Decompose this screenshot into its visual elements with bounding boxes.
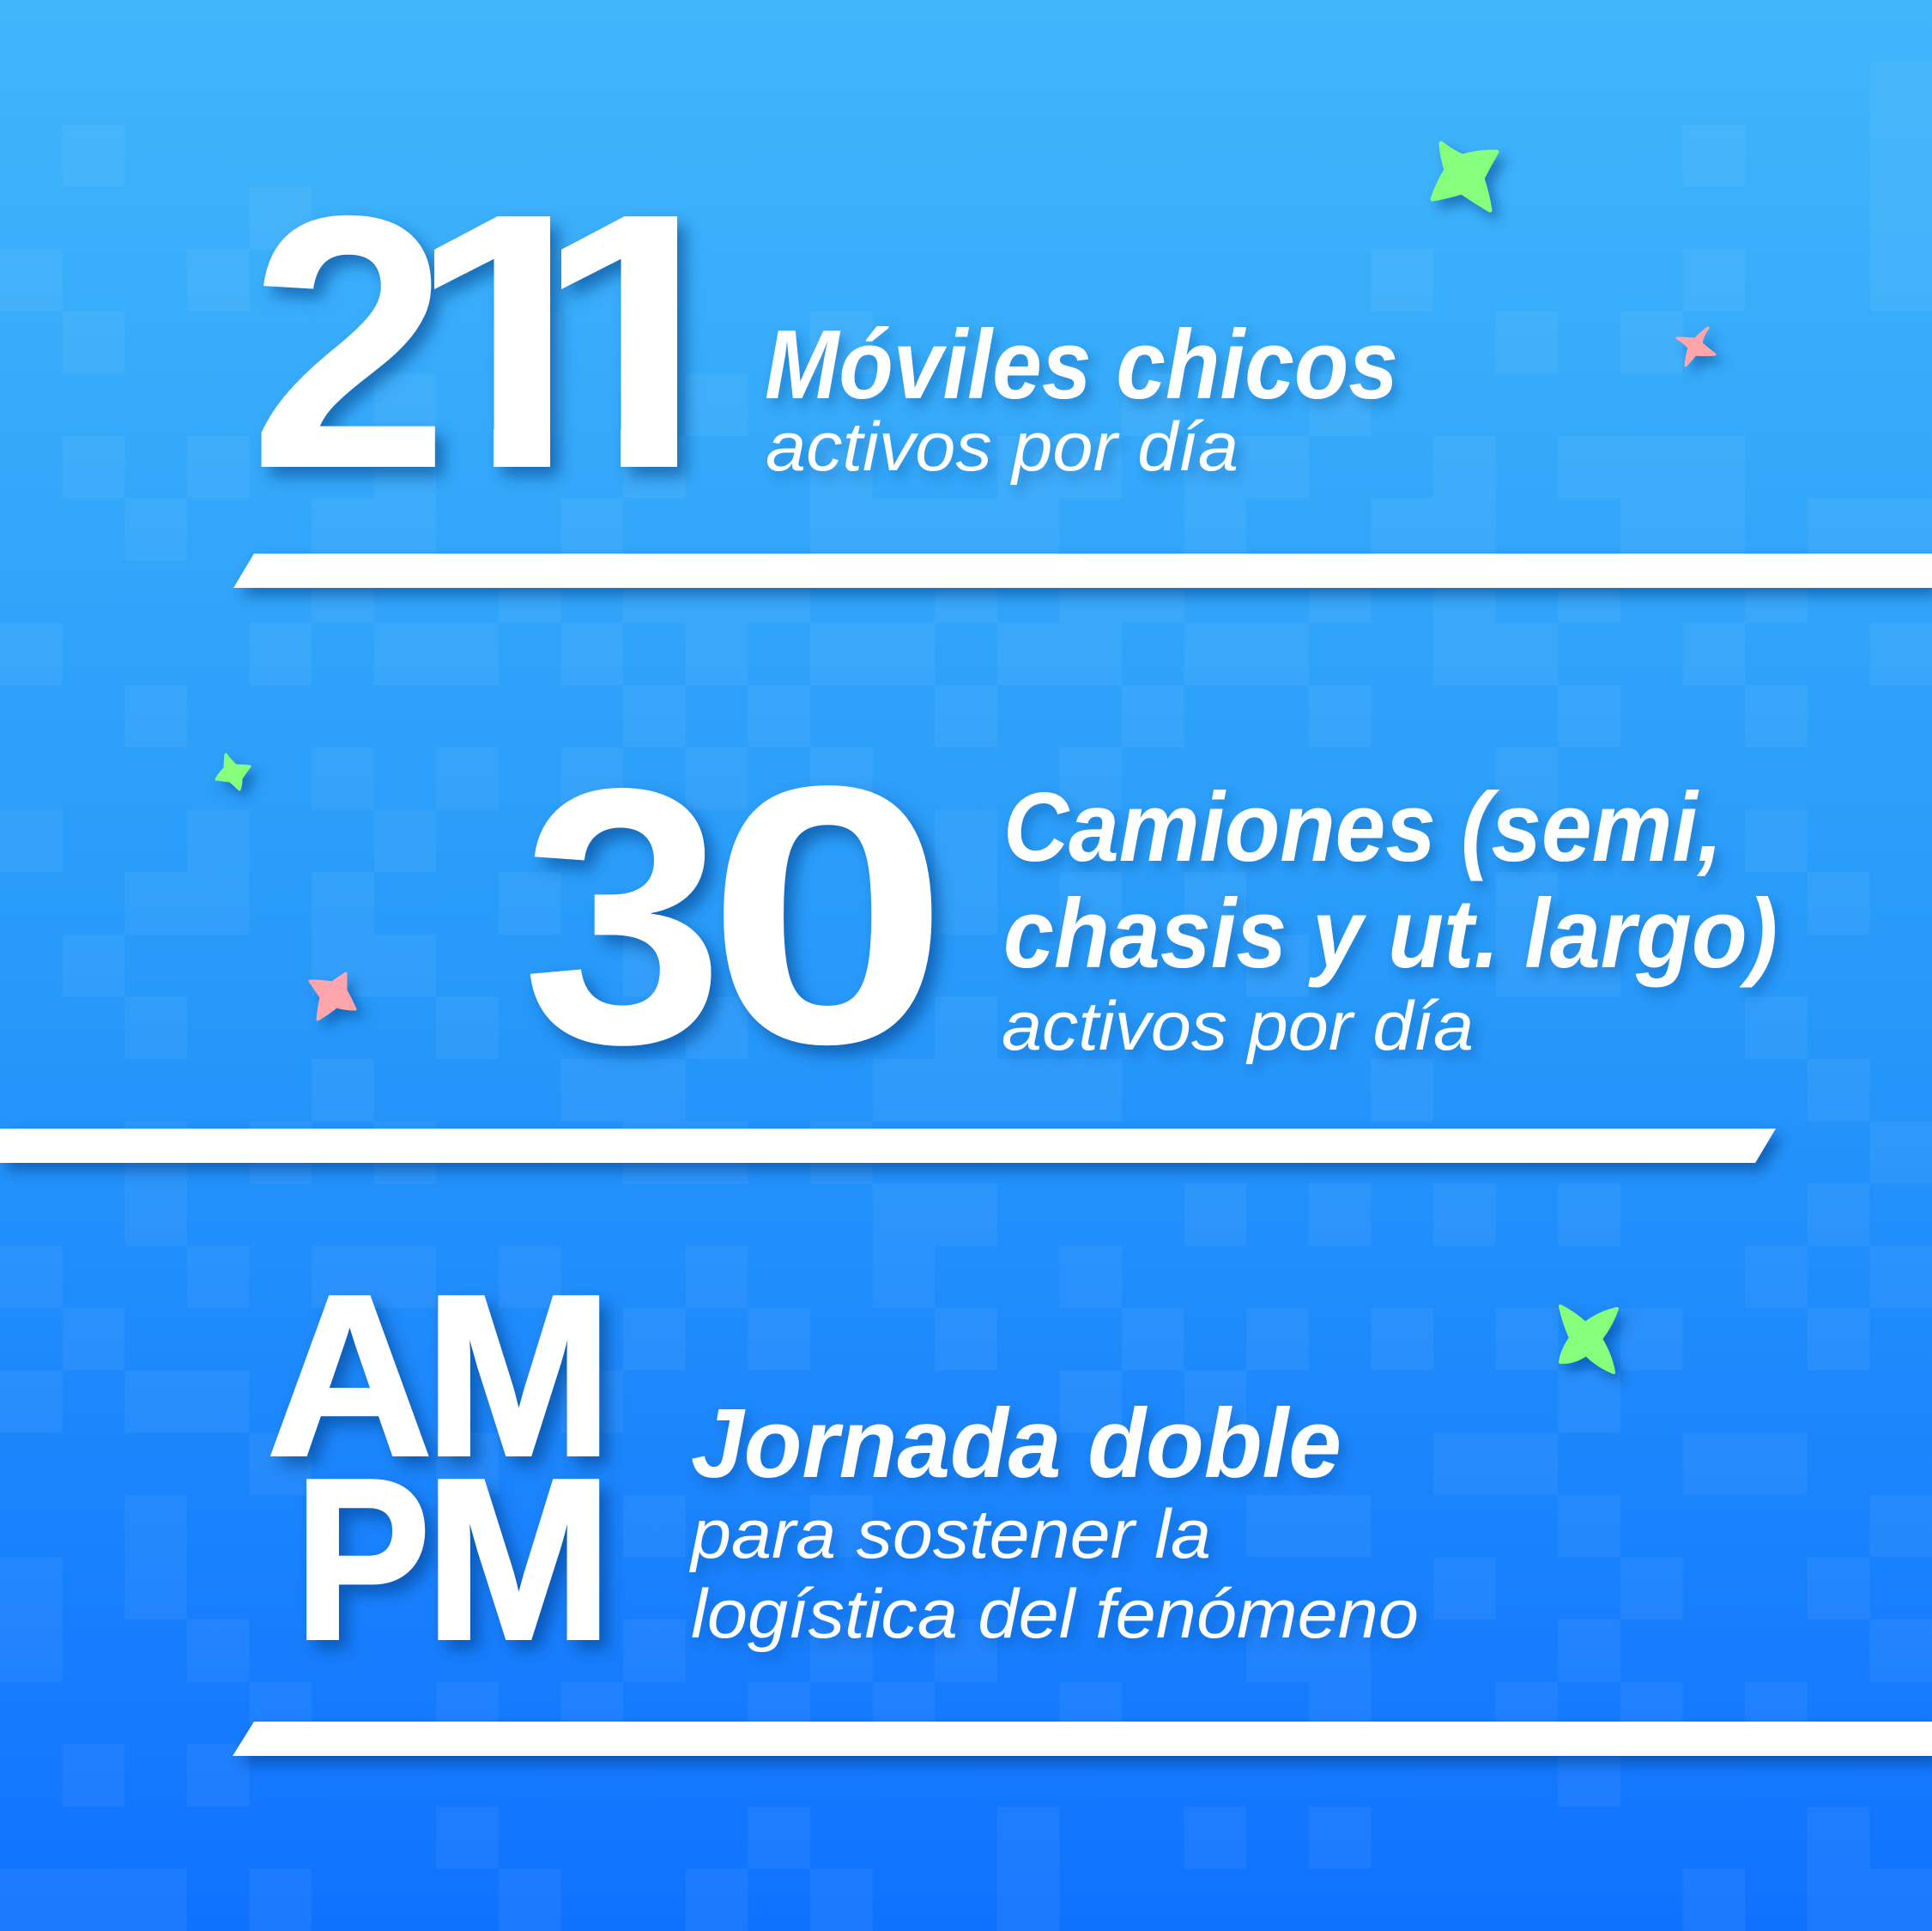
- heading: Jornada doble: Jornada doble: [691, 1389, 1341, 1498]
- big letters AM PM: A: [267, 1247, 433, 1504]
- subtext: activos por día: activos por día: [766, 409, 1239, 486]
- big letters AM PM: M: [425, 1432, 613, 1687]
- panel: camiones: [522, 709, 1778, 1120]
- subtext: para sostener la logística del fenómeno: para sostener la: [688, 1496, 1211, 1573]
- big number 30: 0: [706, 709, 949, 1120]
- icon: pink sparkle middle: [310, 973, 355, 1020]
- heading: Camiones (semi, chasis y ut. largo): chasis y ut. largo): [1003, 880, 1778, 989]
- heading: Camiones (semi, chasis y ut. largo): [1003, 773, 1778, 989]
- panel: jornada doble: [267, 1247, 1419, 1687]
- big number 30: [522, 709, 949, 1120]
- big number 30: 3: [522, 712, 724, 1119]
- big number 211: 1: [517, 137, 766, 544]
- big letters AM PM: [267, 1247, 613, 1687]
- divider 1: [233, 554, 1932, 588]
- divider 2: [0, 1129, 1776, 1163]
- divider 3: [233, 1722, 1932, 1756]
- panel: móviles chicos: [261, 215, 1402, 492]
- icon: pink sparkle top: [1677, 328, 1715, 366]
- subtext: para sostener la logística del fenómeno: logística del fenómeno: [691, 1576, 1419, 1653]
- big number 211: 1: [390, 137, 639, 544]
- subtext: activos por día: activos por día: [1002, 988, 1474, 1065]
- big letters AM PM: P: [294, 1431, 430, 1687]
- icon: small green sparkle middle: [216, 754, 250, 790]
- heading: Camiones (semi, chasis y ut. largo): Camiones (semi,: [1003, 773, 1723, 882]
- icon: large green sparkle top: [1432, 143, 1497, 210]
- heading: Móviles chicos: Móviles chicos: [765, 311, 1398, 420]
- big letters AM PM: M: [425, 1248, 613, 1504]
- subtext: para sostener la logística del fenómeno: [688, 1496, 1419, 1653]
- big number 211: [261, 215, 694, 485]
- big number 211: 2: [249, 142, 450, 544]
- icon: green sparkle bottom: [1560, 1306, 1617, 1372]
